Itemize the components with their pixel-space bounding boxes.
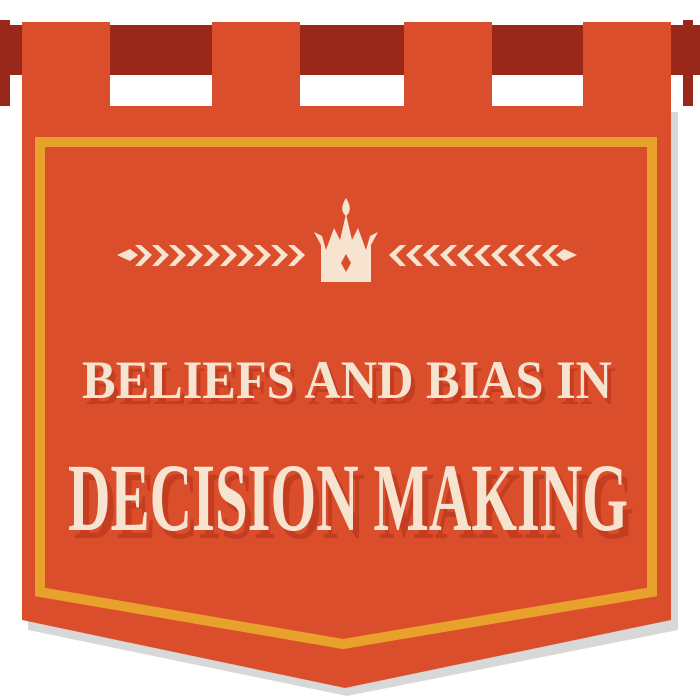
title line 1: BELIEFS AND BIAS IN bbox=[86, 356, 616, 416]
icon: crown with laurels bbox=[117, 198, 577, 282]
banner shadow bbox=[28, 112, 678, 696]
gold border bbox=[40, 142, 652, 644]
rod bbox=[0, 20, 700, 106]
title line 1: BELIEFS AND BIAS IN bbox=[82, 350, 612, 410]
